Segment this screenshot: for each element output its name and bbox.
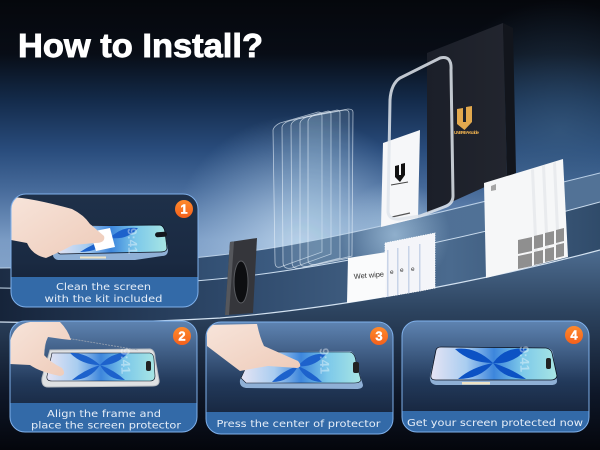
product: instruction card bbox=[381, 130, 420, 227]
title: How to Install? bbox=[18, 28, 263, 65]
badge 4 bbox=[565, 326, 583, 344]
caption band: place the screen protector bbox=[31, 420, 182, 432]
product: dust removal stickers bbox=[484, 159, 568, 278]
badge 1 bbox=[175, 200, 193, 218]
grey squares bbox=[518, 228, 564, 269]
phone: 9:41 bbox=[517, 346, 532, 372]
background bbox=[0, 0, 600, 300]
phone: 9:41 bbox=[317, 348, 333, 374]
caption band: with the kit included bbox=[44, 294, 162, 305]
badge 2 bbox=[173, 327, 191, 345]
hand bbox=[10, 322, 71, 376]
product: alignment frame bbox=[388, 58, 453, 219]
phone bbox=[430, 346, 557, 385]
step 1 card bbox=[11, 194, 198, 307]
phone bbox=[53, 225, 168, 260]
caption band: Align the frame and bbox=[47, 409, 161, 420]
badge 4: 4 bbox=[570, 328, 578, 342]
caption band: Get your screen protected now bbox=[407, 418, 583, 429]
step 3 card bbox=[206, 322, 393, 434]
step 4 card bbox=[402, 321, 589, 432]
caption band: Clean the screen bbox=[56, 282, 151, 293]
phone bbox=[240, 348, 363, 389]
caption band bbox=[402, 411, 589, 432]
product: five glass protectors bbox=[273, 109, 353, 268]
badge 1: 1 bbox=[180, 202, 188, 216]
product: wet wipe sachets: e bbox=[390, 269, 394, 276]
product: wet wipe sachets: e bbox=[400, 267, 404, 274]
hand bbox=[207, 324, 300, 371]
wipe label: Wet wipe bbox=[353, 269, 384, 281]
frame and phone: 9:41 bbox=[118, 348, 134, 374]
badge 3 bbox=[370, 327, 388, 345]
caption band bbox=[206, 412, 393, 434]
step 2 card bbox=[10, 321, 197, 432]
badge 3: 3 bbox=[375, 328, 383, 344]
product: black retail box bbox=[427, 23, 516, 213]
caption band bbox=[11, 277, 198, 307]
box logo: UNBREAKcable bbox=[454, 130, 479, 135]
product: wet wipe sachets: e bbox=[411, 266, 415, 273]
phone: 9:41 bbox=[125, 228, 141, 254]
hand with wipe bbox=[11, 197, 115, 258]
product: wet wipe sachets bbox=[347, 233, 435, 303]
frame and phone bbox=[42, 335, 159, 387]
box logo bbox=[454, 106, 479, 135]
caption band: Press the center of protector bbox=[216, 419, 382, 430]
product: black applicator tool bbox=[225, 238, 257, 315]
caption band bbox=[10, 403, 197, 432]
badge 2: 2 bbox=[178, 328, 186, 344]
shelves bbox=[0, 173, 600, 450]
